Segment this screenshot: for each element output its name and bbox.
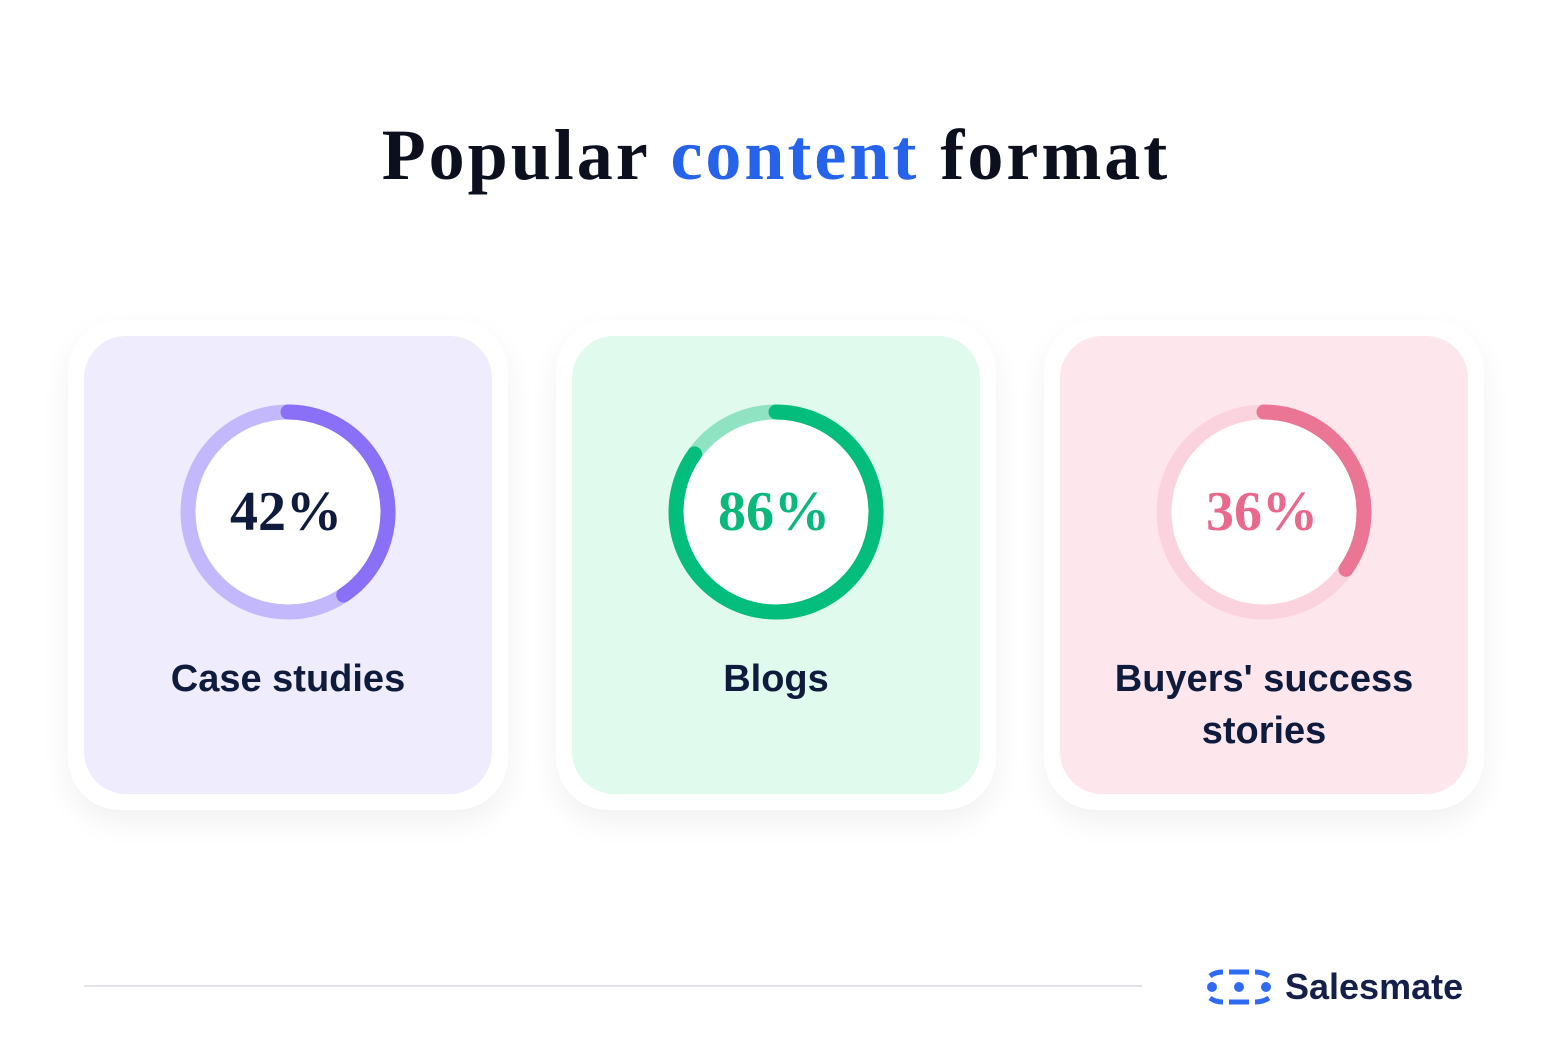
panel: blogs xyxy=(556,320,996,810)
label: stories xyxy=(1202,710,1326,752)
ring chart: 36%: 36% xyxy=(1206,481,1318,543)
ring chart: 42%: 42% xyxy=(230,481,342,543)
label: Case studies xyxy=(171,658,405,700)
ring chart: 36% xyxy=(1156,404,1372,620)
ring chart: 42% xyxy=(180,404,396,620)
logo: Salesmate: Salesmate xyxy=(1285,966,1463,1007)
panel: case studies xyxy=(68,320,508,810)
label: Buyers' success xyxy=(1115,658,1413,700)
panel: buyers' success stories xyxy=(1044,320,1484,810)
title: Popular content format xyxy=(382,115,1170,195)
ring chart: 86%: 86% xyxy=(718,481,830,543)
label: Blogs xyxy=(723,658,829,700)
label xyxy=(1115,658,1413,752)
ring chart: 86% xyxy=(668,404,884,620)
logo: Salesmate xyxy=(1207,966,1463,1007)
